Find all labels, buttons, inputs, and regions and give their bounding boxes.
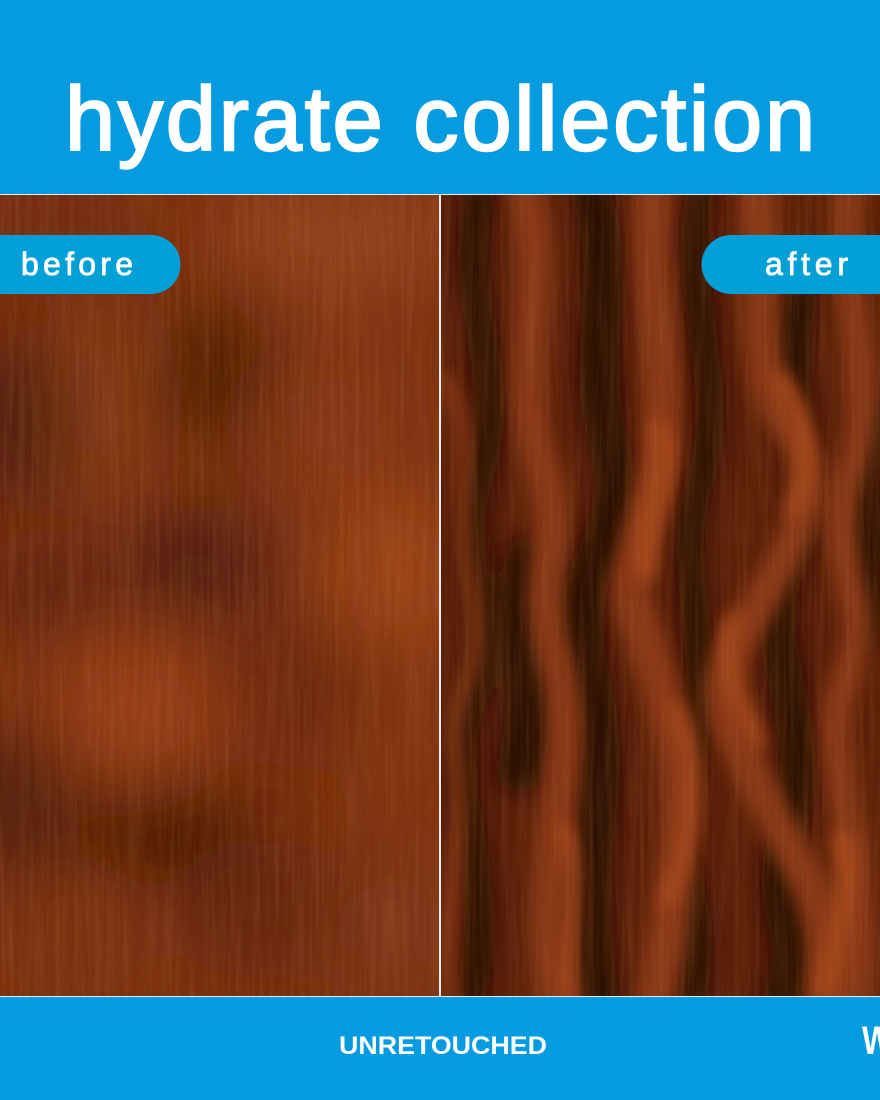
panel: before hair photo (0, 195, 439, 996)
after badge (702, 235, 880, 294)
light wave bands (445, 190, 861, 1000)
title: hydrate collection (65, 70, 815, 170)
bottom banner (0, 997, 880, 1100)
top banner (0, 0, 880, 194)
white frame lines (0, 194, 880, 997)
panel: after hair photo (441, 190, 880, 1000)
before badge (0, 235, 180, 294)
caption: unretouched: UNRETOUCHED (339, 1032, 547, 1060)
before label: before (21, 246, 133, 282)
after label: after (765, 246, 848, 282)
dark wave bands (461, 190, 870, 1000)
